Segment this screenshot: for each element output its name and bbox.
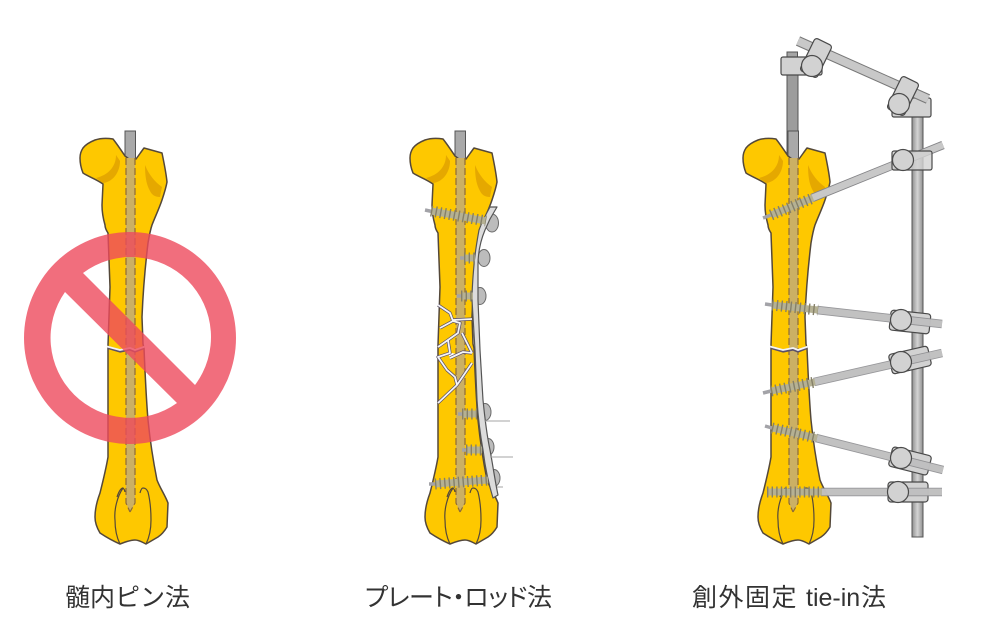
- fracture line: [107, 346, 145, 351]
- diagonal connecting rod: [798, 41, 928, 99]
- vertical support rod, top left: [787, 52, 798, 158]
- rod clamp right: [887, 76, 919, 116]
- thin pointer lines: [485, 421, 513, 487]
- prohibition sign: [24, 232, 236, 444]
- bone: intramedullary nail method: [80, 131, 168, 544]
- top left clamp base: [781, 57, 822, 75]
- label: plate and rod: プレート・ロッド法: [365, 584, 552, 612]
- label: external fixation tie-in: 創外固定: [692, 584, 798, 612]
- fixator pin 2: [765, 304, 942, 334]
- label: intramedullary nail: 髄内ピン法: [65, 584, 190, 612]
- bone plate: [472, 207, 498, 498]
- fixator pin 1: [763, 145, 943, 218]
- bone: plate and rod method: [410, 131, 513, 544]
- vertical support rod, right: [912, 115, 923, 537]
- plate screws: [425, 210, 488, 484]
- bone: external fixation tie-in method: [743, 131, 831, 544]
- upper right clamp base: [892, 98, 931, 117]
- fixator pin 3: [763, 346, 942, 393]
- rod clamp left: [800, 38, 832, 78]
- label: external fixation tie-in: tie-in: [806, 584, 860, 612]
- fixator pin 5: [767, 482, 942, 502]
- comminuted fracture cracks: [438, 305, 472, 403]
- fixator pin 4: [765, 426, 943, 476]
- external fixator frame: [781, 38, 931, 537]
- plate screw heads: [474, 214, 500, 486]
- fracture line: [770, 346, 808, 351]
- label: external fixation tie-in: 法: [861, 584, 886, 612]
